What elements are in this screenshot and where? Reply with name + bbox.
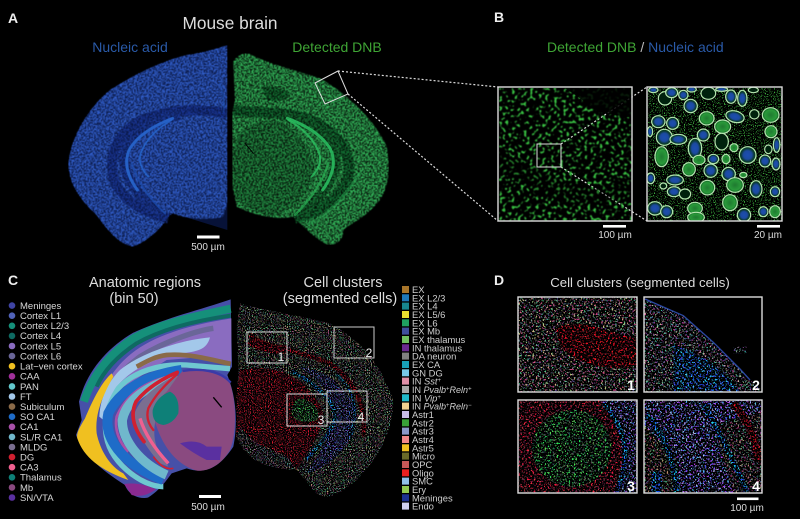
legend: anatomic regions: Cortex L6 xyxy=(20,352,61,362)
region box 2 xyxy=(334,327,374,360)
heading: Detected DNB: Detected DNB xyxy=(292,39,382,55)
scale bar 100 um: 100 µm xyxy=(730,503,764,514)
map: cell clusters hemisphere xyxy=(237,303,393,497)
inset 1: 1 xyxy=(627,377,635,393)
panel A: mouse brain xyxy=(8,10,389,253)
legend: anatomic regions: SN/VTA xyxy=(20,493,54,504)
region box 4 xyxy=(327,391,367,424)
SO CA1 xyxy=(107,370,182,480)
legend: cell clusters xyxy=(402,284,472,512)
legend: cell clusters: EX thalamus xyxy=(412,334,465,345)
CA1 xyxy=(116,375,177,452)
scale bar 500 um xyxy=(191,236,225,253)
legend: cell clusters: Meninges xyxy=(412,492,453,503)
legend: cell clusters: GN DG xyxy=(412,367,443,378)
thalamus xyxy=(153,392,179,425)
legend: anatomic regions: Subiculum xyxy=(20,402,64,413)
hippocampal curves blue xyxy=(127,118,173,190)
heading: Anatomic regions: (bin 50) xyxy=(109,291,159,307)
hippocampal curves green xyxy=(287,118,333,190)
legend: anatomic regions: CA3 xyxy=(20,463,38,474)
heading: Detected DNB / Nucleic acid: Detected DNB / Nucleic acid xyxy=(547,39,724,55)
inset box on brain xyxy=(315,71,348,104)
inset 4: 4 xyxy=(752,478,760,494)
legend: cell clusters: IN Vip xyxy=(412,392,437,403)
legend: cell clusters: + xyxy=(468,386,472,392)
scale bar 100 um xyxy=(730,498,764,514)
teal CA bands xyxy=(292,372,335,460)
legend: cell clusters: DA neuron xyxy=(412,351,456,362)
inset 4 xyxy=(644,400,762,494)
panel D: cluster insets xyxy=(494,272,764,514)
legend: cell clusters: EX L5/6 xyxy=(412,309,445,320)
legend: anatomic regions: FT xyxy=(20,392,32,403)
legend: cell clusters: IN Sst xyxy=(412,376,438,387)
legend: anatomic regions: MLDG xyxy=(20,442,47,453)
SL/R CA1 xyxy=(122,377,177,475)
region box 3 xyxy=(287,394,327,427)
legend: cell clusters: EX L6 xyxy=(412,317,438,328)
region box 1 xyxy=(247,332,287,364)
legend: cell clusters: EX L2/3 xyxy=(412,292,445,303)
legend: cell clusters: + xyxy=(446,386,450,392)
inset 3: 3 xyxy=(627,478,635,494)
zoom lines A to B xyxy=(338,71,647,221)
tear xyxy=(213,397,222,407)
label B: B xyxy=(494,9,504,25)
region box 4: 4 xyxy=(358,410,365,424)
scale bar 500 um: 500 µm xyxy=(191,242,225,253)
label D: D xyxy=(494,272,504,288)
inset 2 xyxy=(644,297,762,393)
legend: cell clusters: EX xyxy=(412,284,425,295)
legend: cell clusters: IN Pvalb xyxy=(412,385,446,395)
box 3 green nucleus xyxy=(292,398,318,422)
inset 1 xyxy=(518,297,637,393)
region box 1: 1 xyxy=(278,350,285,364)
fibre tract xyxy=(99,337,210,420)
legend: cell clusters: EX CA xyxy=(412,359,441,370)
legend: cell clusters: Astr2 xyxy=(412,417,434,428)
legend: cell clusters: Astr5 xyxy=(412,442,434,453)
cortex L4 xyxy=(97,316,231,387)
legend: cell clusters: + xyxy=(446,403,450,409)
legend: anatomic regions: Cortex L4 xyxy=(20,331,61,342)
image: segmented cells right xyxy=(647,87,782,222)
label A: A xyxy=(8,10,18,26)
DG lower blade xyxy=(147,374,177,430)
inset 2: 2 xyxy=(752,377,760,393)
region box 3: 3 xyxy=(318,413,325,427)
legend: anatomic regions: DG xyxy=(20,452,34,464)
image: nucleic acid hemisphere xyxy=(68,45,227,247)
legend: cell clusters: + xyxy=(437,395,441,401)
region box 2: 2 xyxy=(366,346,373,360)
heading: Anatomic regions: Anatomic regions xyxy=(89,275,201,291)
scale bar 20 um: 20 µm xyxy=(754,230,782,241)
heading: Cell clusters: (segmented cells) xyxy=(283,291,397,307)
CAA bottom xyxy=(124,483,156,496)
legend: anatomic regions: Thalamus xyxy=(20,473,62,484)
legend: anatomic regions: Cortex L2/3 xyxy=(20,321,69,332)
legend: cell clusters: Oligo xyxy=(412,467,434,478)
MLDG xyxy=(133,375,178,467)
panel B: magnified views xyxy=(494,9,782,241)
legend: cell clusters: Astr1 xyxy=(412,409,434,420)
cortex L6 xyxy=(107,328,213,393)
scale bar 100 um xyxy=(598,225,632,241)
legend: anatomic regions: Cortex L1 xyxy=(20,311,61,322)
heading: Cell clusters (segmented cells): Cell clusters (segmented cells) xyxy=(550,275,730,290)
image: DNB detail left xyxy=(498,87,632,221)
subiculum xyxy=(137,355,231,367)
legend: anatomic regions: PAN xyxy=(20,382,39,393)
SN/VTA xyxy=(180,441,222,460)
cortex L5 xyxy=(100,318,231,393)
legend: cell clusters: IN thalamus xyxy=(412,342,462,353)
heading: Cell clusters: Cell clusters xyxy=(304,275,382,291)
legend: anatomic regions xyxy=(9,301,83,504)
DG upper blade xyxy=(133,372,177,442)
legend: cell clusters: Reln xyxy=(450,385,468,395)
scale bar 100 um: 100 µm xyxy=(598,230,632,241)
heading: Nucleic acid: Nucleic acid xyxy=(92,39,168,55)
midbrain xyxy=(155,371,235,471)
legend: cell clusters: Astr4 xyxy=(412,434,434,445)
legend: anatomic regions: SL/R CA1 xyxy=(20,432,62,443)
cell outlines xyxy=(647,87,780,222)
heading: Mouse brain: Mouse brain xyxy=(182,13,278,33)
scale bar 20 um xyxy=(754,225,782,241)
map: anatomic regions hemisphere xyxy=(76,299,236,498)
lateral-ventral cortex xyxy=(77,373,128,480)
legend: cell clusters: + xyxy=(438,378,442,384)
cortex L2/3 xyxy=(84,309,231,402)
legend: cell clusters: IN Pvalb xyxy=(412,402,446,412)
legend: cell clusters: Astr3 xyxy=(412,426,434,437)
legend: cell clusters: Endo xyxy=(412,501,434,512)
legend: cell clusters: EX L4 xyxy=(412,301,438,312)
legend: cell clusters: EX Mb xyxy=(412,326,440,337)
legend: anatomic regions: SO CA1 xyxy=(20,412,55,423)
red fibre xyxy=(250,335,364,437)
hippocampal lavender zone xyxy=(300,367,357,473)
inset 3 xyxy=(518,400,637,494)
legend: anatomic regions: CA1 xyxy=(20,422,38,433)
cortex clusters xyxy=(237,303,393,497)
legend: cell clusters: SMC xyxy=(412,476,433,487)
legend: cell clusters: Reln xyxy=(450,402,468,412)
legend: cell clusters: OPC xyxy=(412,459,433,470)
PAN band xyxy=(105,365,230,487)
legend: cell clusters: − xyxy=(468,403,472,409)
scale bar 500 um xyxy=(191,495,225,513)
label C: C xyxy=(8,272,18,288)
legend: cell clusters: Micro xyxy=(412,451,435,462)
meninges edge xyxy=(645,299,750,380)
legend: anatomic regions: Mb xyxy=(20,483,33,494)
legend: anatomic regions: Lat−ven cortex xyxy=(20,362,83,373)
panel C: anatomy and clusters xyxy=(8,272,472,513)
scale bar 500 um: 500 µm xyxy=(191,502,225,513)
legend: anatomic regions: Meninges xyxy=(20,301,61,312)
legend: anatomic regions: CAA xyxy=(20,372,40,383)
legend: anatomic regions: Cortex L5 xyxy=(20,342,61,352)
image: detected DNB hemisphere xyxy=(232,53,389,245)
CA3 xyxy=(140,418,168,463)
legend: cell clusters: Ery xyxy=(412,484,426,495)
